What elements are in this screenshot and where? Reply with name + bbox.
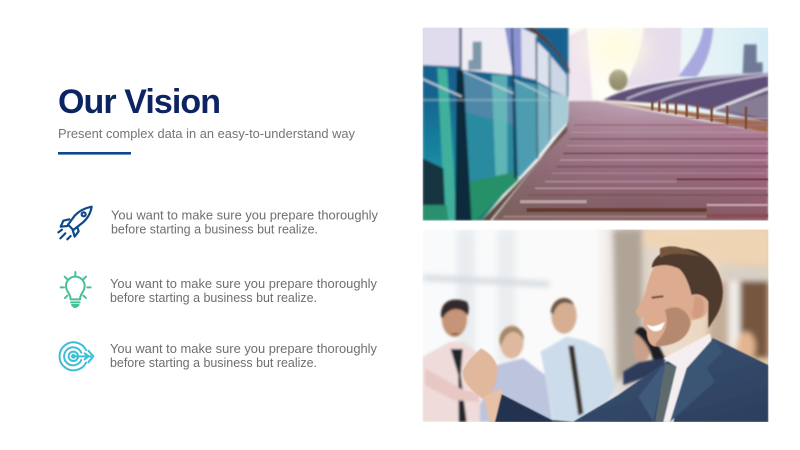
text: second point: You want to make sure you prepare thoroughly — [110, 276, 378, 291]
photo: bridge walkway — [423, 28, 768, 221]
heading underline — [58, 152, 131, 155]
icon: rocket — [58, 207, 92, 239]
text: first point — [111, 208, 379, 236]
text: third point — [110, 341, 378, 370]
face — [636, 264, 708, 347]
hair — [652, 248, 723, 328]
text: first point: before starting a business but realize. — [111, 222, 318, 236]
text: first point: You want to make sure you prepare thoroughly — [111, 208, 379, 222]
photo: business team — [423, 230, 768, 422]
suit body — [495, 338, 768, 422]
text: second point: before starting a business but realize. — [110, 290, 317, 305]
subtitle: Present complex data in an easy-to-understand way — [58, 126, 355, 141]
icon: target — [60, 342, 93, 370]
icon: light bulb — [61, 272, 91, 307]
title: Our Vision — [58, 83, 221, 121]
text: third point: You want to make sure you prepare thoroughly — [110, 341, 378, 356]
text: second point — [110, 276, 378, 305]
text: third point: before starting a business but realize. — [110, 355, 317, 370]
fist and arm — [463, 348, 498, 398]
